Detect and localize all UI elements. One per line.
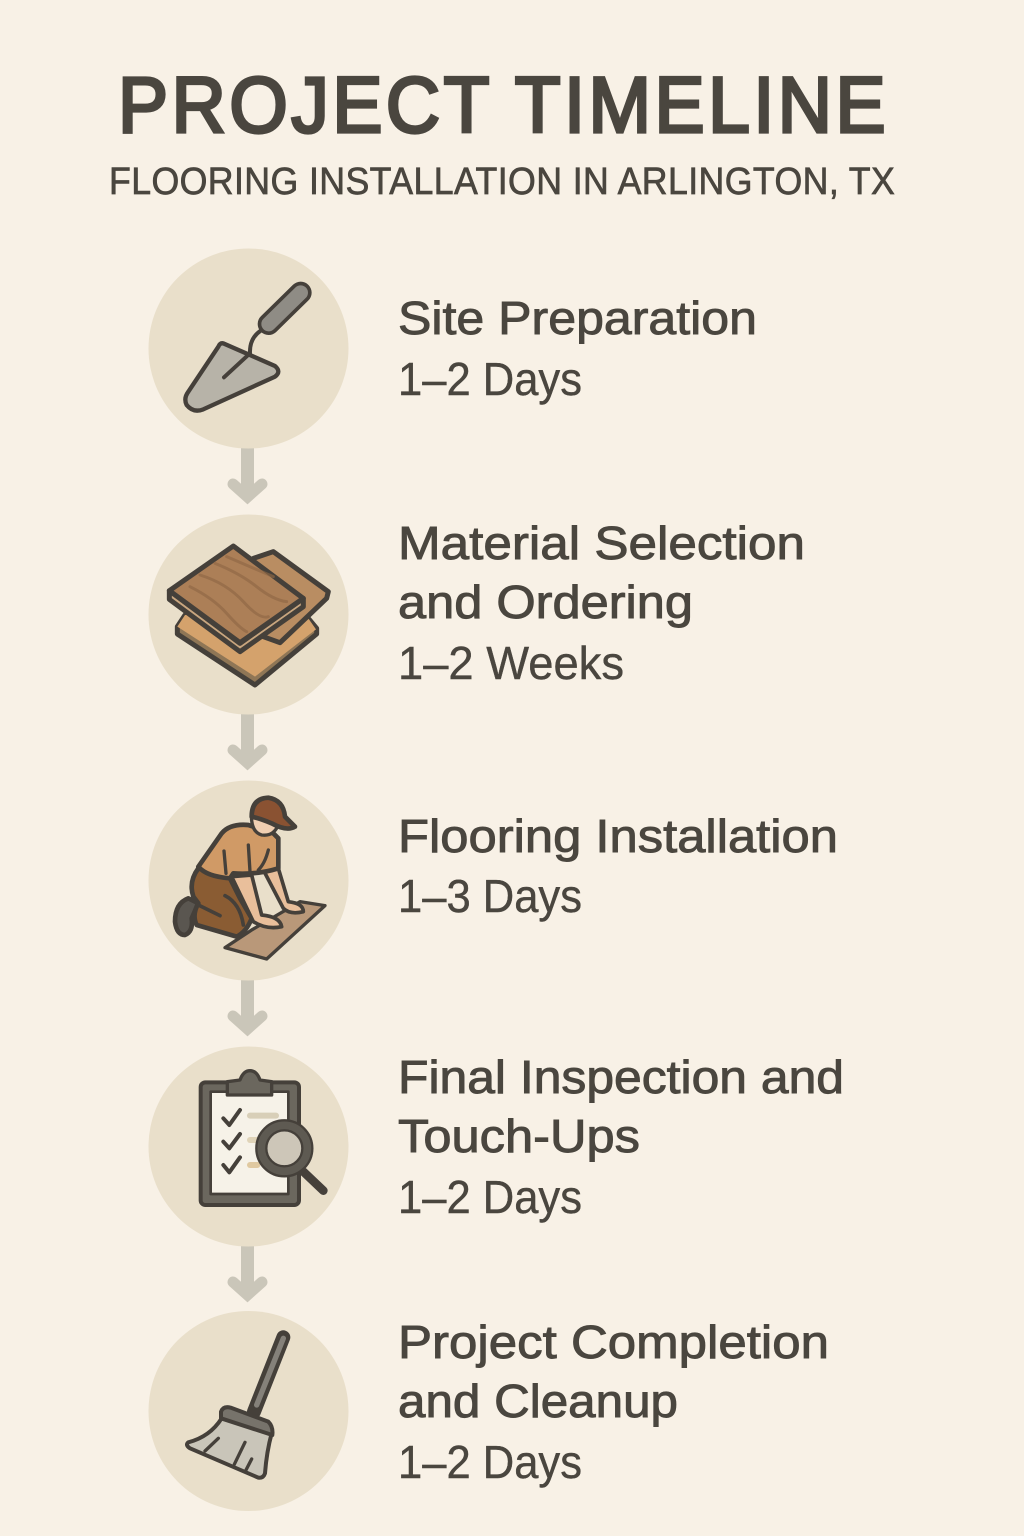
icon circle: clipboard background	[148, 1046, 348, 1246]
step 4 heading line 2: Touch-Ups	[398, 1110, 640, 1162]
step 3: flooring installation	[148, 780, 838, 980]
step 5 heading line 2: and Cleanup	[398, 1375, 678, 1427]
step 4: final inspection	[148, 1046, 844, 1246]
step 2 heading line 2: and Ordering	[398, 576, 693, 628]
icon circle: worker background	[148, 780, 348, 980]
step 1 heading: Site Preparation	[398, 292, 757, 344]
icon: trowel	[185, 293, 301, 411]
subtitle: FLOORING INSTALLATION IN ARLINGTON, TX	[109, 160, 895, 202]
step 1 duration: 1–2 Days	[398, 353, 582, 405]
step 4 duration: 1–2 Days	[398, 1171, 582, 1223]
step 2 heading: Material Selection	[398, 517, 805, 569]
icon circle: broom background	[148, 1311, 348, 1511]
step 3 heading: Flooring Installation	[398, 810, 838, 862]
arrow: step 4 to step 5	[233, 1245, 262, 1296]
step 4 heading: Final Inspection and	[398, 1051, 844, 1103]
step 1: site preparation	[148, 248, 757, 448]
step 2 duration: 1–2 Weeks	[398, 637, 624, 689]
icon: kneeling worker	[175, 798, 325, 959]
icon circle: trowel background	[148, 248, 348, 448]
step 5: project completion	[148, 1311, 829, 1511]
arrow: step 1 to step 2	[233, 448, 262, 498]
arrow: step 3 to step 4	[233, 980, 262, 1030]
step 5 duration: 1–2 Days	[398, 1436, 582, 1488]
step 2: material selection	[148, 514, 805, 714]
icon: wood planks	[169, 546, 328, 685]
icon circle: planks background	[148, 514, 348, 714]
arrow: step 2 to step 3	[233, 714, 262, 764]
step 3 duration: 1–3 Days	[398, 870, 582, 922]
icon: broom	[187, 1337, 283, 1478]
step 5 heading: Project Completion	[398, 1316, 829, 1368]
icon: clipboard with magnifier	[201, 1071, 323, 1205]
title: PROJECT TIMELINE	[118, 61, 886, 149]
